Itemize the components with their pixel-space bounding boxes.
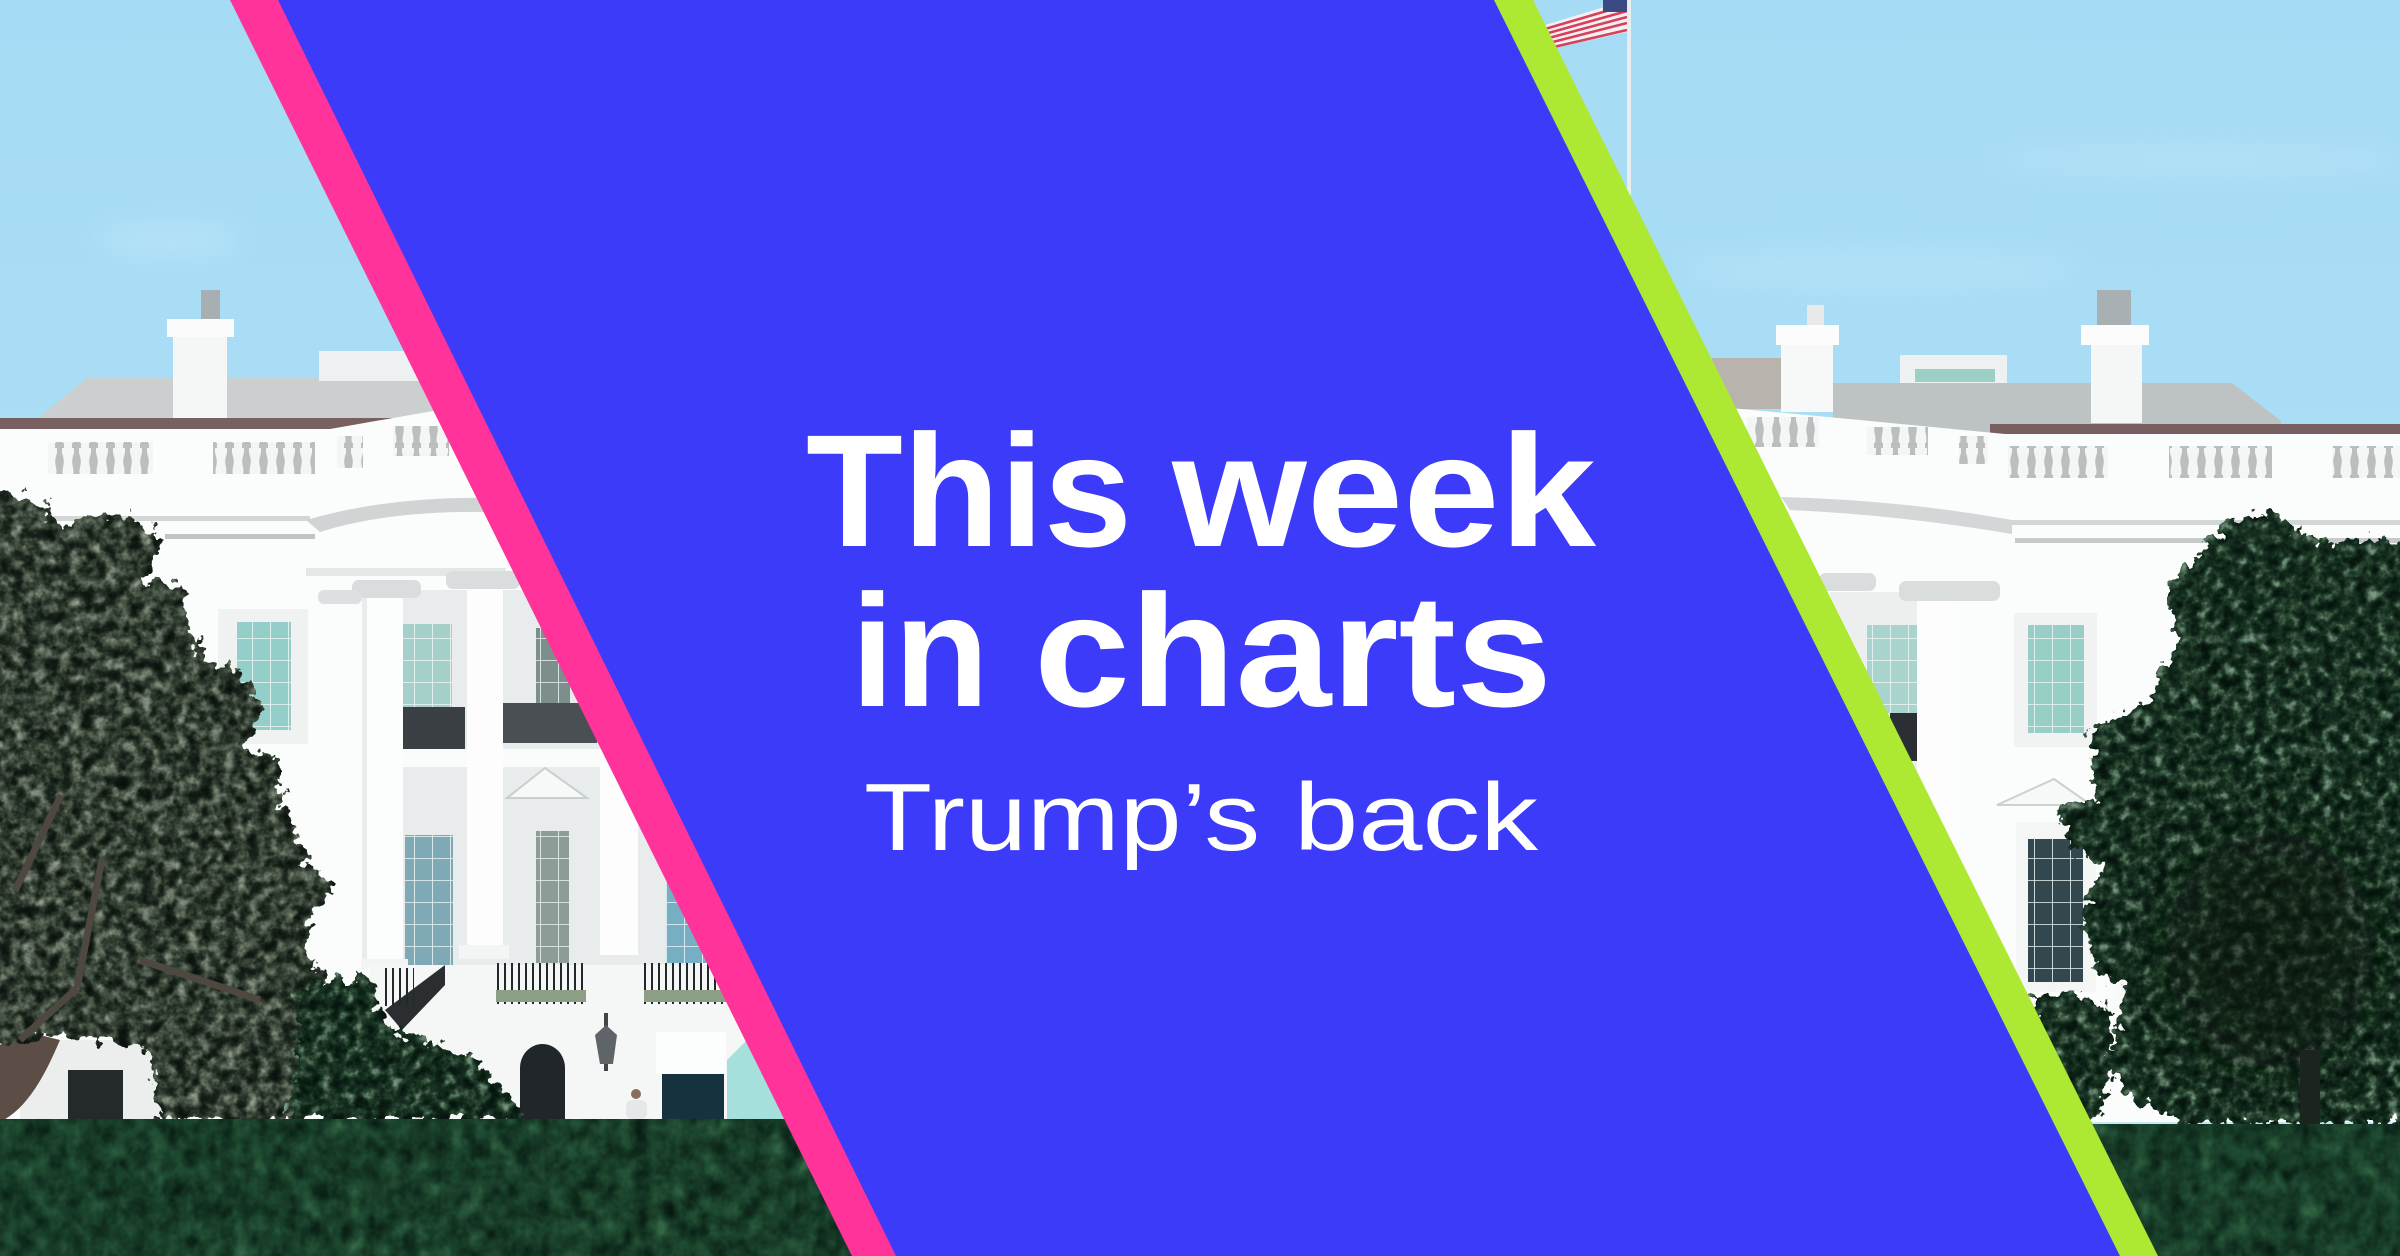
fountain [727, 1032, 790, 1119]
dark doorway [662, 1074, 724, 1119]
upper right window [536, 628, 570, 704]
pink diagonal stripe [230, 0, 920, 1256]
hedge [0, 1119, 2400, 1256]
lower pediment [1997, 779, 2091, 805]
balconies [403, 703, 603, 767]
cornice [40, 498, 506, 576]
upper left window [218, 609, 308, 744]
garden shrubs [290, 975, 530, 1120]
left chimney [167, 290, 234, 418]
title line two: charts [1034, 561, 1552, 740]
right tree [2057, 509, 2400, 1124]
title line one: This [806, 401, 1132, 580]
balustrades [1747, 417, 2400, 478]
White House, right view [1545, 0, 2400, 1124]
terrace and ground floor [370, 965, 800, 1120]
rear roof structure [319, 351, 419, 381]
parapet line [0, 418, 420, 429]
rear structures [1712, 355, 2007, 409]
title line two: in [851, 561, 989, 740]
portico recess [362, 590, 692, 965]
awning [656, 1032, 726, 1074]
trunk [0, 1030, 60, 1122]
portico recess [1830, 592, 1920, 852]
upper centre window [403, 624, 452, 708]
canopy [2057, 509, 2400, 1124]
lantern [595, 1013, 617, 1071]
subtitle: back [1294, 764, 1539, 871]
subtitle: Trump’s [864, 764, 1260, 871]
blue central panel [278, 0, 2120, 1256]
right column [1819, 573, 2000, 860]
lower pediment [507, 768, 587, 798]
American flag [1545, 0, 1627, 50]
title [806, 401, 1597, 871]
portico window [1867, 625, 1917, 713]
balustrades [48, 426, 449, 474]
facade wall [0, 408, 800, 1120]
lower left wing [20, 1040, 170, 1120]
flagpole [1627, 0, 1631, 195]
left tree [0, 490, 530, 1122]
title line one: week [1171, 401, 1597, 580]
green diagonal stripe [1470, 0, 2158, 1256]
canopy shadow [2165, 830, 2375, 1070]
lower balconies [382, 963, 730, 1030]
shrub [2030, 991, 2112, 1122]
person [626, 1089, 647, 1119]
White House, left view [0, 290, 800, 1122]
cornice [1781, 497, 2400, 543]
lower windows [405, 831, 708, 970]
chimneys [1776, 290, 2149, 423]
roof [1833, 383, 2281, 440]
portico balcony [1890, 713, 1917, 761]
facade wall [1600, 395, 2400, 1122]
arched door [520, 1044, 565, 1119]
parapet line [1990, 424, 2400, 434]
canopy [0, 490, 334, 1120]
lower window [2016, 822, 2096, 992]
upper window [2014, 613, 2097, 747]
trunk [2300, 1050, 2320, 1124]
branches [15, 795, 260, 1040]
roof [38, 378, 480, 425]
columns [318, 571, 638, 969]
